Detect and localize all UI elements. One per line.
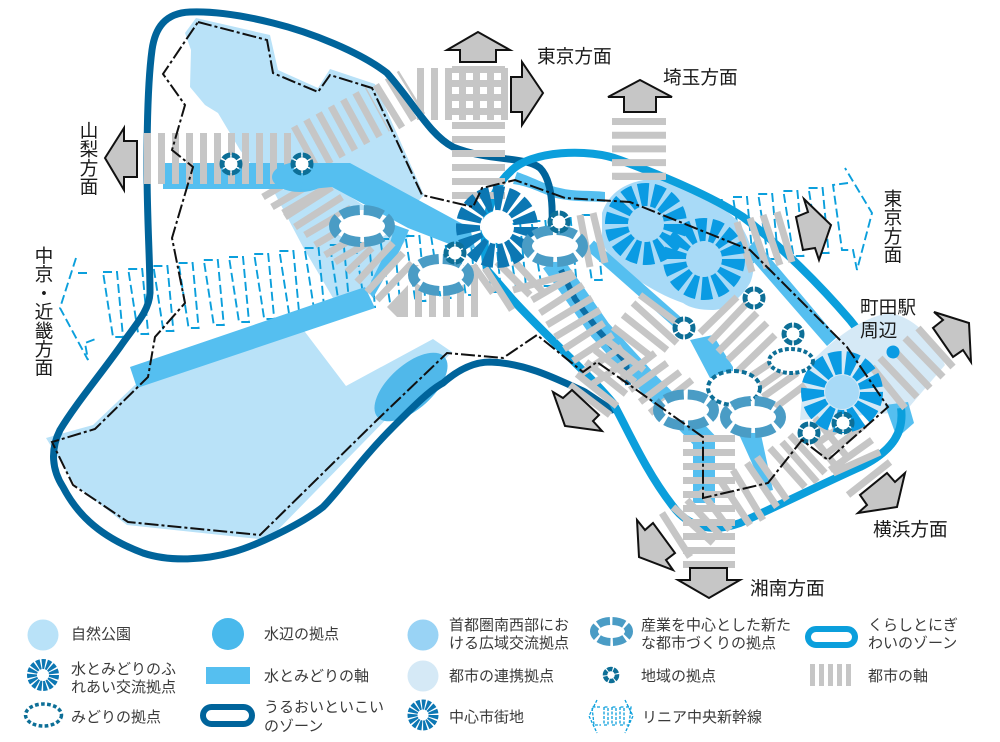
city boundary line <box>52 22 888 535</box>
city centre hub: west central <box>468 198 526 256</box>
direction labels: 湘南方面 <box>750 578 825 599</box>
linear shinkansen route <box>60 168 872 360</box>
legend: city axis <box>810 668 928 685</box>
wide-area exchange hub backdrop <box>602 178 754 310</box>
legend: linkage hub <box>408 660 554 692</box>
legend: waterside hub <box>212 618 339 650</box>
legend: city centre: 中心市街地 <box>449 709 524 726</box>
legend: linear shinkansen: リニア中央新幹線 <box>642 709 762 726</box>
Machida linkage hub area <box>800 313 945 420</box>
legend: water greenery axis <box>206 667 369 685</box>
water and greenery axes <box>130 163 837 503</box>
natural park middle <box>273 187 410 298</box>
industry hubs <box>334 210 714 426</box>
direction labels: 東京方面 <box>537 46 612 67</box>
Machida station dot <box>886 346 900 358</box>
direction labels: 中京・近畿方面 <box>32 246 54 377</box>
legend: greenery relax zone: のゾーン <box>264 718 323 735</box>
direction labels: 埼玉方面 <box>663 67 738 88</box>
wide-area exchange hub 2 <box>674 230 734 288</box>
corner of living zone over triangle <box>860 408 902 467</box>
legend: water greenery exchange hub: れあい交流拠点 <box>71 679 176 696</box>
direction labels <box>32 46 948 599</box>
legend: city centre <box>412 704 524 726</box>
legend: natural park: 自然公園 <box>71 626 131 643</box>
gray bars below waterfront axis <box>263 170 381 272</box>
legend: living zone: くらしとにぎ <box>868 617 958 634</box>
legend: industry hub: 産業を中心とした新た <box>641 617 791 634</box>
natural park north <box>185 18 424 210</box>
main water axis and waterside hub over stripes <box>272 162 475 248</box>
legend: regional hub <box>605 668 716 685</box>
legend: industry hub: な都市づくりの拠点 <box>641 635 776 652</box>
waterside triangle near Machida <box>885 402 914 438</box>
legend: greenery relax zone: うるおいといこい <box>264 699 384 716</box>
city axes gray stripes <box>144 66 953 570</box>
wide-area exchange hub 1 <box>616 194 676 254</box>
legend: living zone <box>808 617 958 652</box>
legend: city axis: 都市の軸 <box>868 668 928 685</box>
legend: linear shinkansen <box>589 700 762 733</box>
regional hubs <box>222 155 852 442</box>
legend: greenery relax zone <box>203 699 384 735</box>
greenery and living zone dark line <box>54 12 612 559</box>
greenery hubs <box>708 349 813 405</box>
legend: wide-area exchange hub: ける広域交流拠点 <box>449 635 569 652</box>
legend: linkage hub: 都市の連携拠点 <box>449 668 554 685</box>
legend: living zone: わいのゾーン <box>868 635 957 652</box>
direction labels: 横浜方面 <box>873 519 948 540</box>
dark zone north segment over stripes <box>387 73 453 147</box>
dark zone segment under city axes <box>561 270 628 385</box>
legend: regional hub: 地域の拠点 <box>641 668 716 685</box>
light-blue living and bustle zone <box>485 153 902 528</box>
industry hub east <box>725 401 781 433</box>
direction labels: 山梨方面 <box>78 121 98 196</box>
legend: greenery hub: みどりの拠点 <box>71 709 161 726</box>
direction labels: 周辺 <box>860 320 898 341</box>
legend: wide-area exchange hub: 首都圏南西部にお <box>449 617 569 634</box>
legend: water greenery exchange hub: 水とみどりのふ <box>71 661 176 678</box>
waterside hub south <box>363 341 459 433</box>
legend: greenery hub <box>26 704 161 726</box>
direction labels: 東京方面 <box>882 189 902 264</box>
legend: water greenery axis: 水とみどりの軸 <box>264 668 369 685</box>
natural park south <box>46 328 452 540</box>
wide-area exchange hub Machida <box>812 362 872 422</box>
legend: waterside hub: 水辺の拠点 <box>264 626 339 643</box>
legend <box>26 617 958 735</box>
legend: wide-area exchange hub <box>408 617 569 652</box>
legend: industry hub <box>594 617 791 652</box>
direction arrows <box>105 32 971 598</box>
legend: water greenery exchange hub <box>32 661 176 696</box>
legend: natural park <box>28 620 131 650</box>
direction labels: 町田駅 <box>860 297 916 318</box>
